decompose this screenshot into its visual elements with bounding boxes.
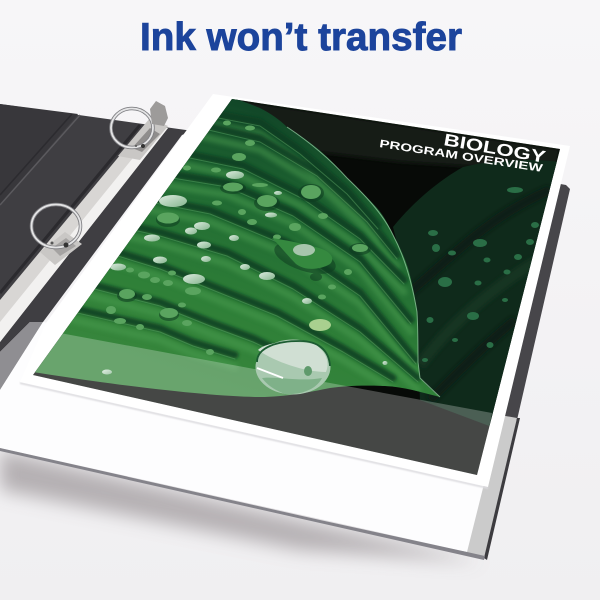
ring: upper (111, 101, 168, 160)
droplet halos (117, 182, 371, 321)
left cover (0, 104, 193, 352)
background droplets (422, 187, 539, 362)
water droplets (102, 171, 388, 374)
green droplets (106, 120, 368, 355)
title: Ink won’t transfer (140, 16, 462, 59)
sheet shadow (20, 382, 488, 489)
subheading: Program Overview: PROGRAM OVERVIEW (379, 138, 544, 175)
white page (0, 322, 500, 552)
photo (33, 99, 560, 475)
lower clear pocket strip (462, 415, 517, 556)
binder shadow (0, 450, 482, 562)
sheet heading text (379, 130, 548, 175)
heading: Biology: BIOLOGY (442, 130, 548, 167)
leaf edge highlight (287, 127, 440, 397)
medium droplet (272, 238, 332, 269)
large droplet (256, 340, 330, 394)
pocket edge (0, 322, 43, 390)
pocket overlay (25, 333, 492, 480)
ring: lower (32, 204, 82, 265)
right binder edge (500, 183, 570, 420)
metal ring strip (0, 125, 168, 342)
leaf ribs (60, 113, 418, 390)
dark background leaf (393, 160, 560, 430)
dark background (33, 99, 560, 475)
page bottom edge (0, 448, 485, 560)
white sheet (20, 94, 570, 487)
pale green droplet (309, 319, 331, 331)
main hosta leaf (33, 97, 440, 397)
printed sheet (20, 94, 570, 489)
binder with insert pocket (0, 104, 570, 562)
